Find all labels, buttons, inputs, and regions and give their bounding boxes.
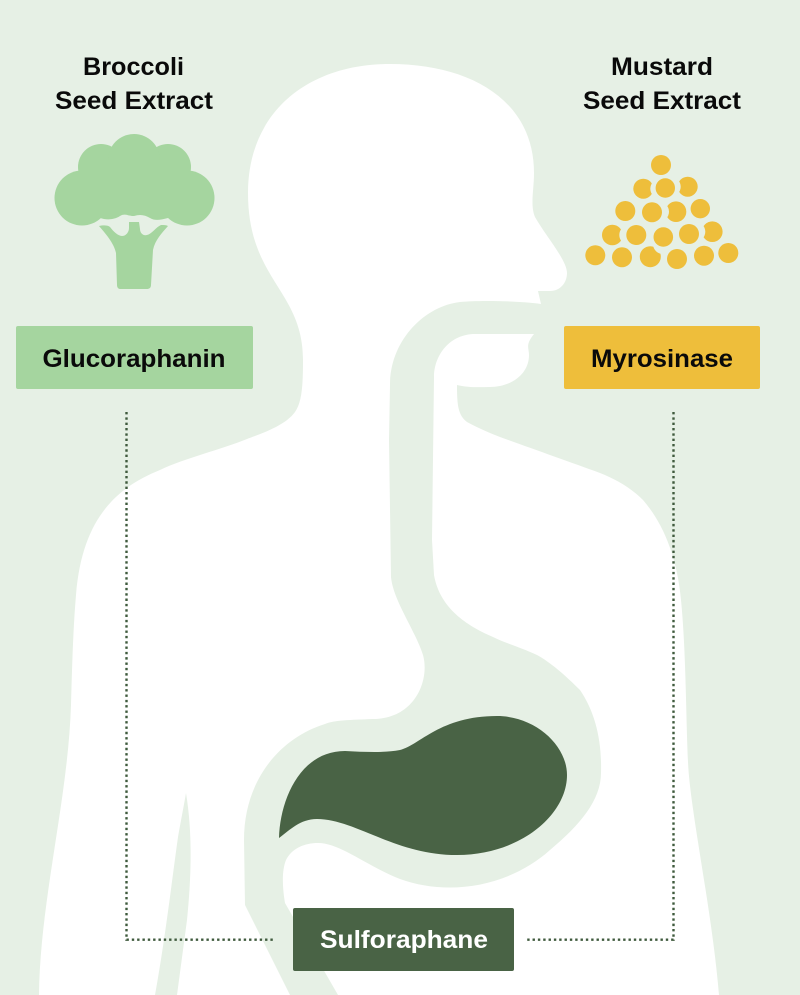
label: myrosinase bbox=[564, 326, 760, 389]
human body silhouette bbox=[39, 64, 719, 995]
gap between arm and torso bbox=[155, 793, 191, 995]
icon: broccoli bbox=[54, 134, 214, 289]
stomach bbox=[279, 716, 567, 855]
label: myrosinase: Myrosinase bbox=[591, 345, 733, 373]
label: sulforaphane: Sulforaphane bbox=[320, 926, 488, 954]
heading: mustard seed extract bbox=[583, 53, 742, 115]
connector: glucoraphanin to sulforaphane bbox=[126, 412, 274, 940]
label: glucoraphanin bbox=[16, 326, 253, 389]
heading: broccoli seed extract: Seed Extract bbox=[55, 87, 214, 115]
digestive tract bbox=[244, 301, 601, 995]
heading: broccoli seed extract bbox=[55, 53, 214, 115]
heading: broccoli seed extract: Broccoli bbox=[83, 53, 184, 81]
connector: myrosinase to sulforaphane bbox=[527, 412, 674, 940]
heading: mustard seed extract: Seed Extract bbox=[583, 87, 742, 115]
heading: mustard seed extract: Mustard bbox=[611, 53, 713, 81]
label: glucoraphanin: Glucoraphanin bbox=[42, 345, 226, 373]
label: sulforaphane bbox=[293, 908, 514, 971]
icon: mustard seeds bbox=[585, 155, 738, 269]
